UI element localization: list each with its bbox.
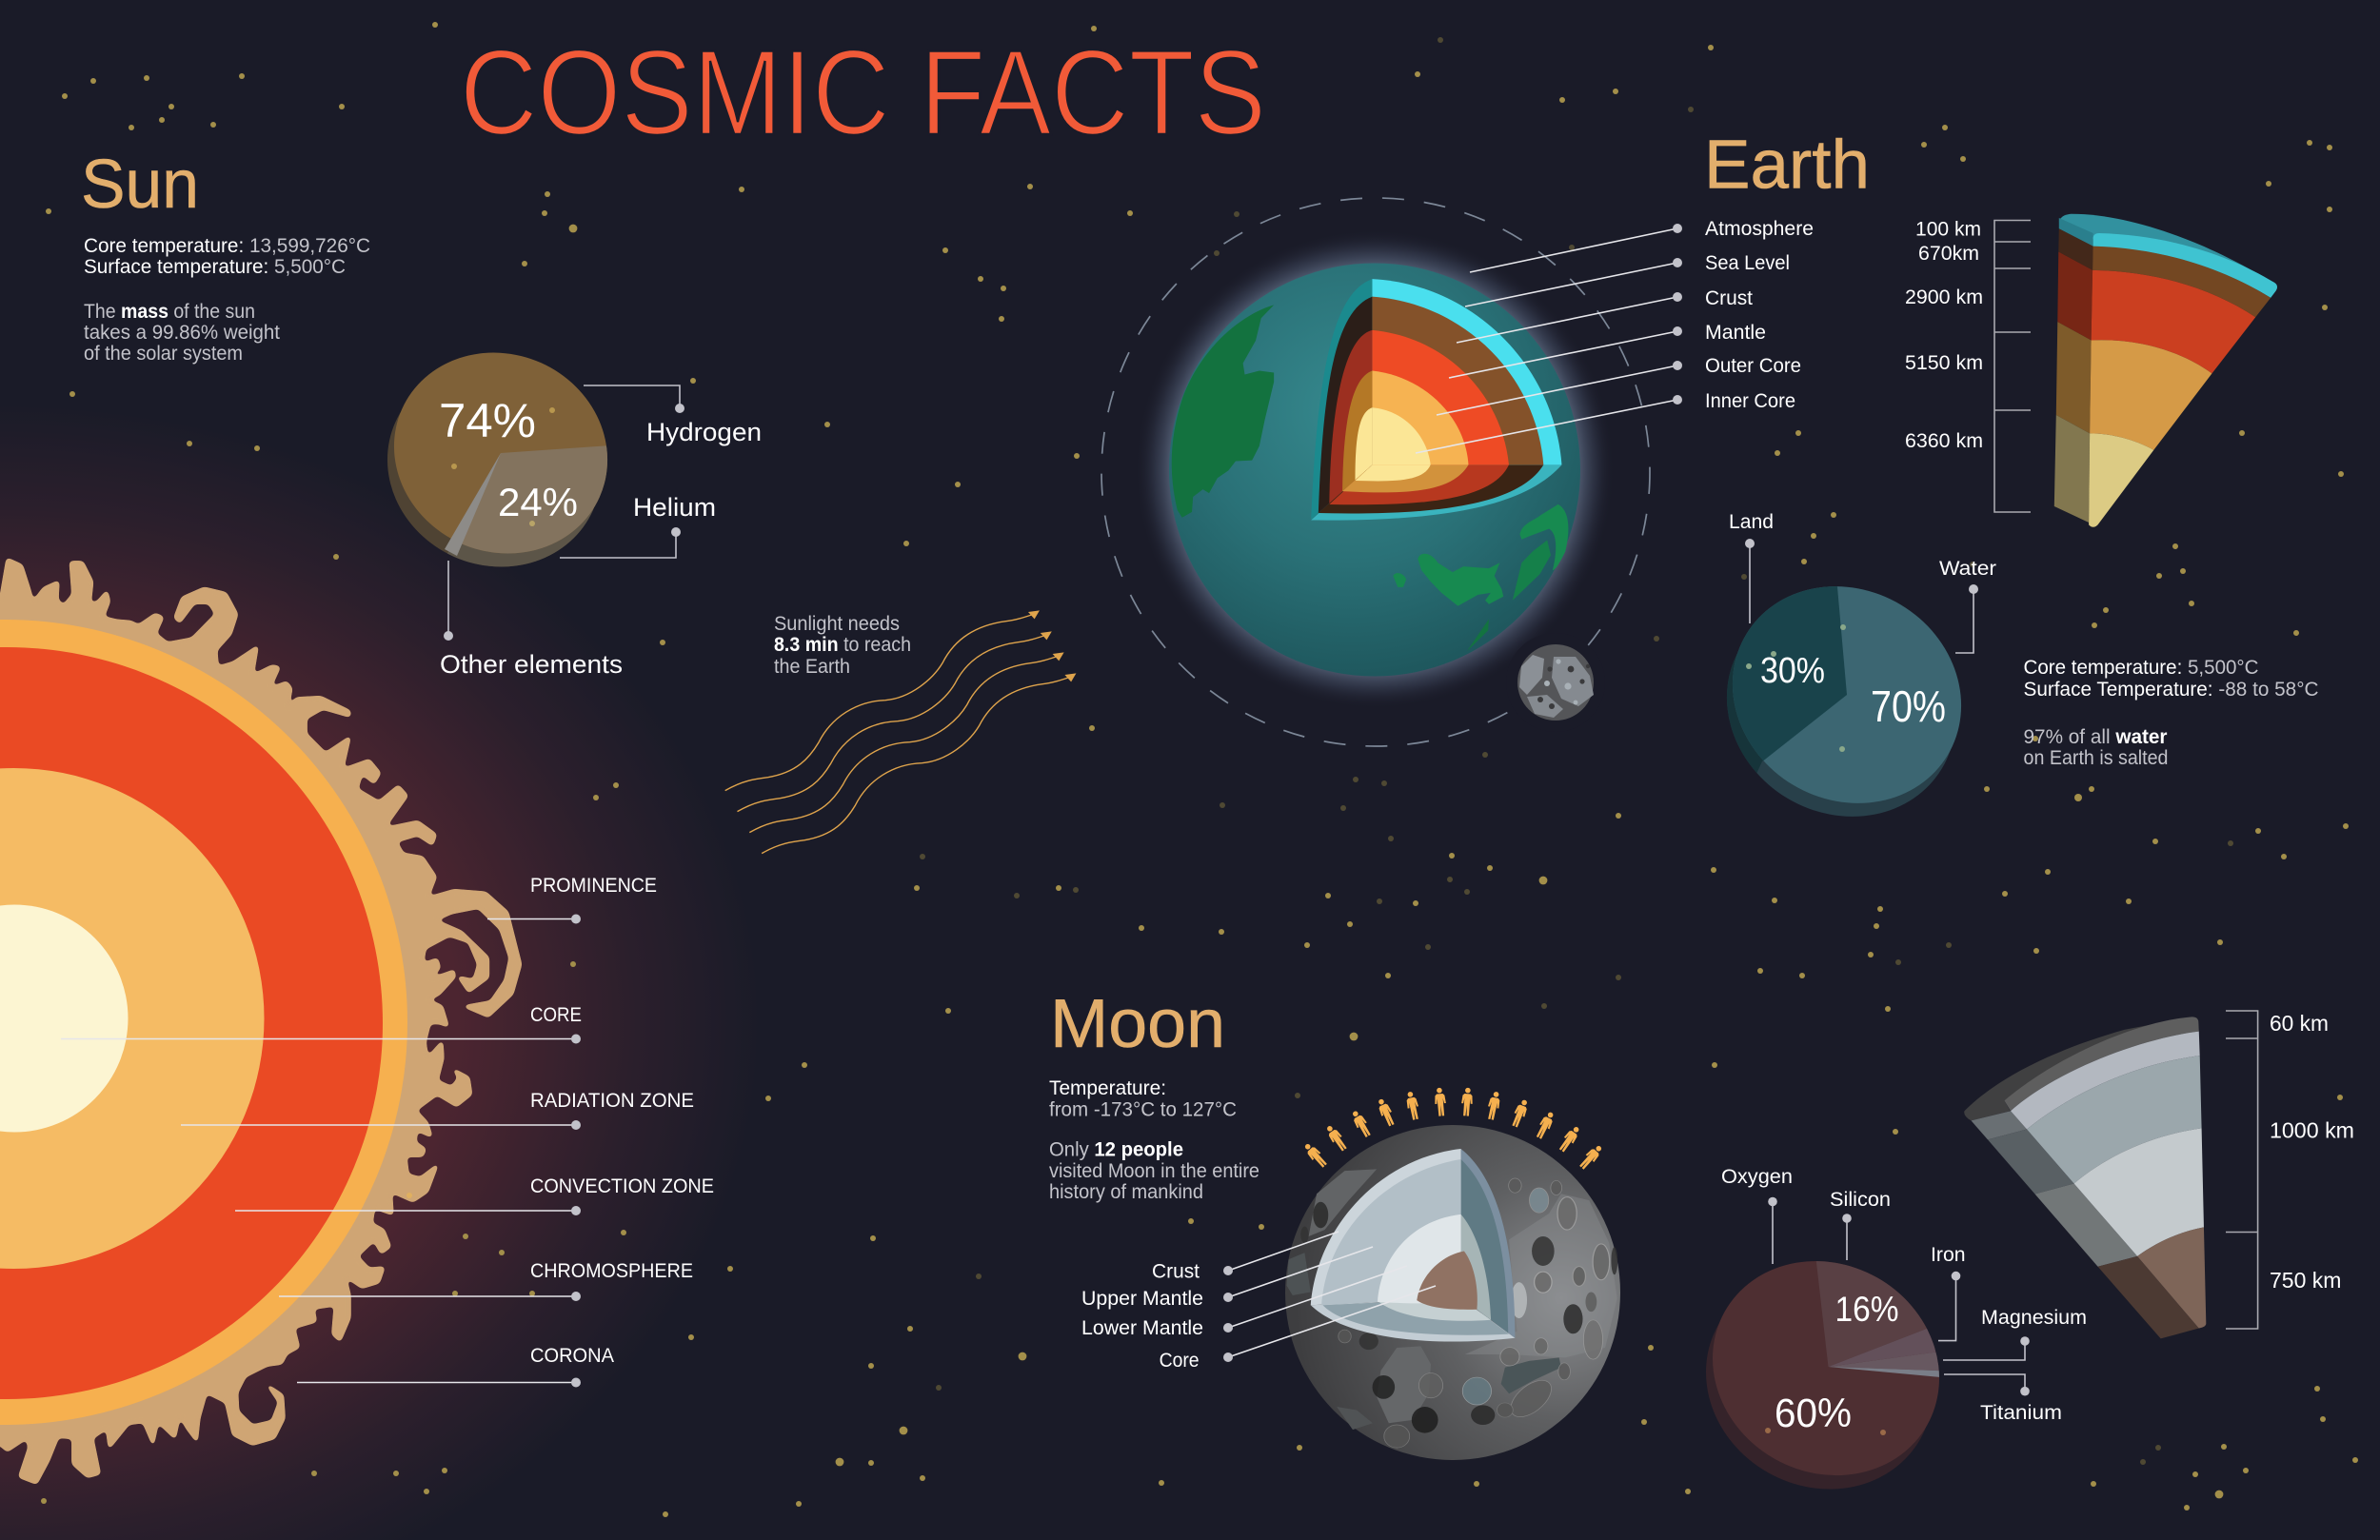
label: prominence	[487, 874, 657, 923]
label: prominence: PROMINENCE	[530, 874, 657, 897]
cutaway walls	[1311, 279, 1372, 520]
orbit path	[1101, 198, 1650, 746]
label: Titanium	[1944, 1374, 2062, 1424]
label: Helium	[560, 493, 716, 558]
inner core layer	[1372, 407, 1431, 464]
label: Magnesium	[1943, 1307, 2087, 1360]
label: Silicon	[1830, 1189, 1891, 1260]
crust layer	[1372, 297, 1543, 464]
text: salted water	[2024, 726, 2169, 769]
wedge side face	[1972, 1111, 2027, 1139]
pie value: water: 70%	[1871, 681, 1946, 731]
label: Titanium: Titanium	[1980, 1402, 2062, 1424]
label: radiation zone: RADIATION ZONE	[530, 1089, 694, 1112]
pie value: hydrogen: 74%	[439, 394, 536, 447]
text: mass of the sun: takes a 99.86% weight	[84, 322, 280, 344]
label: Water	[1939, 558, 1996, 653]
labels: earth layers: Sea Level	[1705, 252, 1790, 274]
text: earth temperatures: Surface Temperature: -88 to 58°C	[2024, 679, 2319, 701]
sun glow	[0, 381, 857, 1540]
wedge side face	[2059, 218, 2093, 247]
wedge front face	[2004, 1017, 2199, 1111]
label: Hydrogen: Hydrogen	[646, 418, 762, 446]
moon upper mantle layer	[1321, 1159, 1461, 1305]
labels: moon layers: Lower Mantle	[1081, 1317, 1203, 1339]
depth scale: earth: 5150 km	[1905, 352, 1983, 374]
text: salted water: 97% of all water	[2024, 726, 2167, 748]
label: Other elements: Other elements	[440, 650, 623, 679]
cutaway floor	[1311, 464, 1561, 521]
core	[0, 904, 128, 1133]
depth scale: moon: 750 km	[2270, 1268, 2342, 1293]
depth scale: earth	[1905, 219, 2031, 512]
pie value: silicon: 16%	[1835, 1290, 1898, 1329]
corona with prominences	[0, 559, 521, 1483]
continents	[1172, 305, 1568, 651]
globe	[1169, 263, 1580, 676]
text: sunlight travel time: the Earth	[774, 656, 850, 678]
sun layer labels	[61, 874, 714, 1388]
depth scale: earth: 6360 km	[1905, 430, 1983, 452]
moon sphere	[1285, 1125, 1620, 1460]
panel: moon facts	[1049, 986, 1259, 1203]
labels: earth layers: Inner Core	[1705, 390, 1795, 412]
labels: earth layers: Atmosphere	[1705, 218, 1814, 240]
text: temperatures: Core temperature: 13,599,726°C	[84, 235, 370, 257]
text: moon temperature: Temperature:	[1049, 1077, 1166, 1099]
text: moon temperature	[1049, 1077, 1237, 1121]
depth scale: earth: 2900 km	[1905, 286, 1983, 308]
surface patches	[1465, 1194, 1617, 1357]
label: corona	[297, 1344, 615, 1388]
labels: moon layers: Upper Mantle	[1081, 1288, 1203, 1310]
labels: earth layers: Crust	[1705, 287, 1753, 309]
sun cross-section	[0, 559, 521, 1483]
arrows: sunlight rays	[725, 610, 1076, 854]
earth layers wedge	[2054, 214, 2277, 527]
label: chromosphere: CHROMOSPHERE	[530, 1259, 693, 1282]
text: people visited moon: visited Moon in the entire	[1049, 1160, 1259, 1182]
star on corona	[407, 1193, 412, 1198]
text: earth temperatures	[2024, 657, 2319, 701]
labels: moon layers: Core	[1160, 1350, 1200, 1372]
heading: Moon: Moon	[1050, 986, 1225, 1062]
moon core	[1417, 1251, 1478, 1310]
moon cutaway floor	[1311, 1298, 1515, 1342]
text: people visited moon: history of mankind	[1049, 1181, 1203, 1203]
label: Iron	[1931, 1244, 1965, 1341]
label: Water: Water	[1939, 558, 1996, 580]
label: convection zone: CONVECTION ZONE	[530, 1175, 714, 1197]
text: people visited moon	[1049, 1138, 1259, 1203]
label: Land: Land	[1729, 511, 1774, 533]
label: radiation zone	[181, 1089, 694, 1130]
text: temperatures: Surface temperature: 5,500°C	[84, 256, 346, 278]
depth scale: earth: 100 km	[1915, 219, 1981, 240]
label: Hydrogen	[584, 385, 762, 446]
craters	[1300, 1178, 1617, 1448]
moon cutaway right wall	[1461, 1149, 1515, 1338]
mantle layer	[1372, 330, 1509, 464]
heading: Earth: Earth	[1704, 128, 1870, 204]
depth scale: earth: 670km	[1918, 243, 1979, 265]
pie value: oxygen: 60%	[1775, 1391, 1852, 1436]
text: sunlight travel time: 8.3 min to reach	[774, 634, 911, 656]
leader lines: earth layers	[1416, 224, 1682, 453]
panel: sun facts	[81, 147, 370, 365]
pie value: helium: 24%	[498, 480, 578, 524]
earth cross-section globe	[1135, 229, 1615, 709]
depth scale: moon: 1000 km	[2270, 1118, 2354, 1143]
atmosphere layer	[1372, 279, 1561, 464]
earth surface pie chart	[1727, 586, 1961, 817]
moon layers wedge	[1964, 1017, 2206, 1338]
label: core: CORE	[530, 1003, 582, 1026]
mini moon	[1506, 633, 1605, 732]
text: mass of the sun	[84, 301, 280, 365]
label: Iron: Iron	[1931, 1244, 1965, 1266]
text: earth temperatures: Core temperature: 5,500°C	[2024, 657, 2258, 679]
label: corona: CORONA	[530, 1344, 615, 1367]
moon lower mantle layer	[1378, 1214, 1461, 1303]
atmosphere glow	[1135, 229, 1615, 709]
moon composition pie chart	[1706, 1261, 1939, 1489]
text: sunlight travel time	[774, 613, 911, 678]
label: convection zone	[235, 1175, 714, 1215]
convection zone	[0, 647, 383, 1399]
labels: earth layers: Outer Core	[1705, 355, 1801, 377]
labels: earth layers	[1705, 218, 1814, 412]
label: chromosphere	[279, 1259, 693, 1301]
text: mass of the sun: The mass of the sun	[84, 301, 255, 323]
text: moon temperature: from -173°C to 127°C	[1049, 1098, 1237, 1121]
label: Magnesium: Magnesium	[1981, 1307, 2087, 1329]
label: core	[61, 1003, 582, 1043]
text: people visited moon: Only 12 people	[1049, 1138, 1183, 1161]
pie value: land: 30%	[1760, 651, 1825, 691]
outer core layer	[1372, 371, 1469, 464]
depth scale: moon: 60 km	[2270, 1011, 2329, 1036]
title: COSMIC FACTS	[460, 25, 1266, 160]
label: Land	[1729, 511, 1774, 623]
labels: earth layers: Mantle	[1705, 322, 1766, 344]
sun composition pie chart	[387, 352, 607, 567]
moon crust layer	[1311, 1149, 1461, 1305]
wedge top surface	[2059, 214, 2277, 294]
wedge front face	[2093, 233, 2277, 298]
moon cross-section globe	[1285, 1125, 1620, 1460]
text: mass of the sun: of the solar system	[84, 343, 243, 365]
text: sunlight travel time: Sunlight needs	[774, 613, 900, 635]
label: Helium: Helium	[633, 493, 716, 522]
label: Oxygen: Oxygen	[1721, 1166, 1793, 1188]
text: salted water: on Earth is salted	[2024, 747, 2169, 769]
label: Oxygen	[1721, 1166, 1793, 1264]
chromosphere	[0, 620, 407, 1425]
icons: twelve people	[1302, 1087, 1604, 1172]
heading: Sun: Sun	[81, 147, 199, 223]
wedge back edge	[1964, 1017, 2192, 1120]
depth scale: moon	[2226, 1011, 2354, 1329]
label: Silicon: Silicon	[1830, 1189, 1891, 1211]
labels: moon layers: Crust	[1152, 1261, 1200, 1283]
label: Other elements	[440, 561, 623, 679]
text: temperatures	[84, 235, 370, 278]
labels: moon layers	[1081, 1232, 1436, 1372]
radiation zone	[0, 768, 265, 1269]
